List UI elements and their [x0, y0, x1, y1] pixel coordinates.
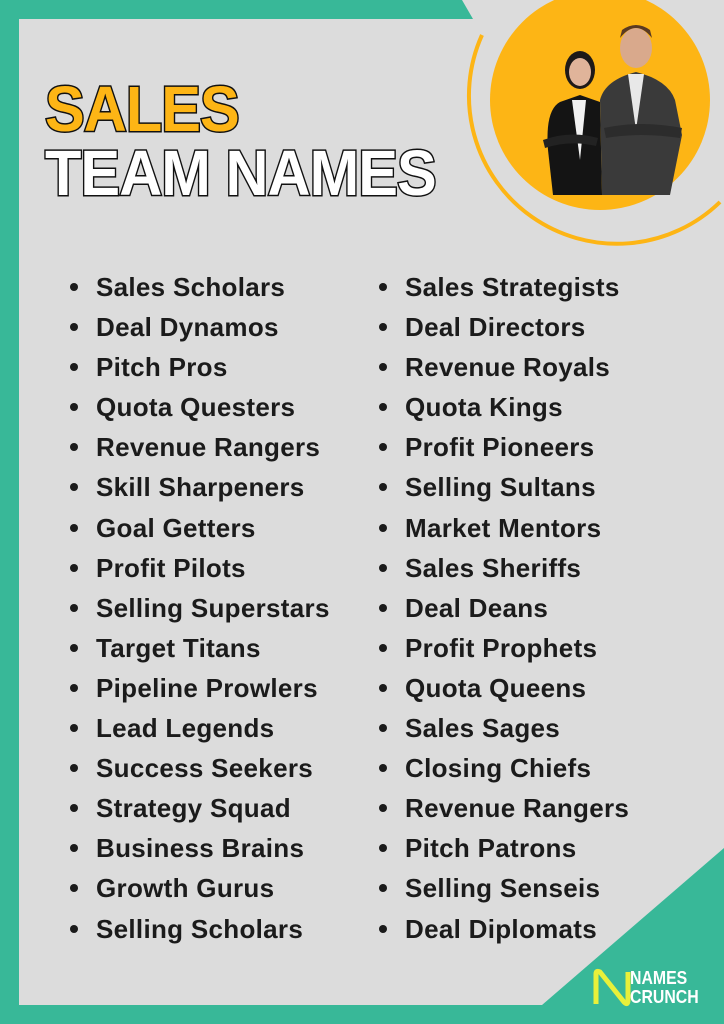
list: column 1: Success Seekers — [96, 753, 313, 783]
logo: Names Crunch — [594, 968, 699, 1007]
list: column 1: Growth Gurus — [96, 873, 274, 903]
list: column 1: Pipeline Prowlers — [96, 673, 318, 703]
list: column 2: Market Mentors — [405, 513, 601, 543]
icon: man — [600, 25, 682, 195]
title: TEAM NAMES: TEAM NAMES — [45, 137, 436, 209]
list: column 2: Quota Queens — [405, 673, 586, 703]
list: column 1: Profit Pilots — [96, 553, 246, 583]
title: SALES: SALES — [45, 73, 239, 145]
list: column 2: Closing Chiefs — [405, 753, 591, 783]
list: column 1: Quota Questers — [96, 392, 295, 422]
list: column 2: Sales Sheriffs — [405, 553, 581, 583]
list: column 1: Goal Getters — [96, 513, 256, 543]
list: column 1: Business Brains — [96, 833, 304, 863]
list: column 1: Lead Legends — [96, 713, 274, 743]
list: column 1: Pitch Pros — [96, 352, 228, 382]
list: column 1: Selling Scholars — [96, 914, 303, 944]
list: column 2: Revenue Royals — [405, 352, 610, 382]
list: column 2: Pitch Patrons — [405, 833, 576, 863]
list: column 2 — [379, 272, 629, 944]
yellow circle with people — [490, 0, 710, 210]
decorative ring arc — [469, 35, 720, 244]
logo: Names Crunch: CRUNCH — [630, 987, 699, 1007]
list: column 2: Deal Deans — [405, 593, 548, 623]
list: column 2: Quota Kings — [405, 392, 563, 422]
list: column 1: Sales Scholars — [96, 272, 285, 302]
list: column 2: Selling Senseis — [405, 873, 600, 903]
logo: Names Crunch: NAMES — [630, 968, 687, 988]
list: column 1 — [70, 272, 330, 944]
list: column 2: Deal Directors — [405, 312, 586, 342]
icon: woman — [543, 51, 602, 195]
list: column 1: Selling Superstars — [96, 593, 330, 623]
list: column 2: Profit Prophets — [405, 633, 597, 663]
list: column 2: Revenue Rangers — [405, 793, 629, 823]
list: column 2: Selling Sultans — [405, 472, 596, 502]
list: column 1: Revenue Rangers — [96, 432, 320, 462]
list: column 2: Profit Pioneers — [405, 432, 594, 462]
list: column 1: Target Titans — [96, 633, 261, 663]
list: column 1: Deal Dynamos — [96, 312, 279, 342]
list: column 2: Sales Strategists — [405, 272, 620, 302]
list: column 1: Strategy Squad — [96, 793, 291, 823]
icon: N logo — [594, 968, 630, 1006]
list: column 2: Sales Sages — [405, 713, 560, 743]
list: column 1: Skill Sharpeners — [96, 472, 305, 502]
list: column 2: Deal Diplomats — [405, 914, 597, 944]
